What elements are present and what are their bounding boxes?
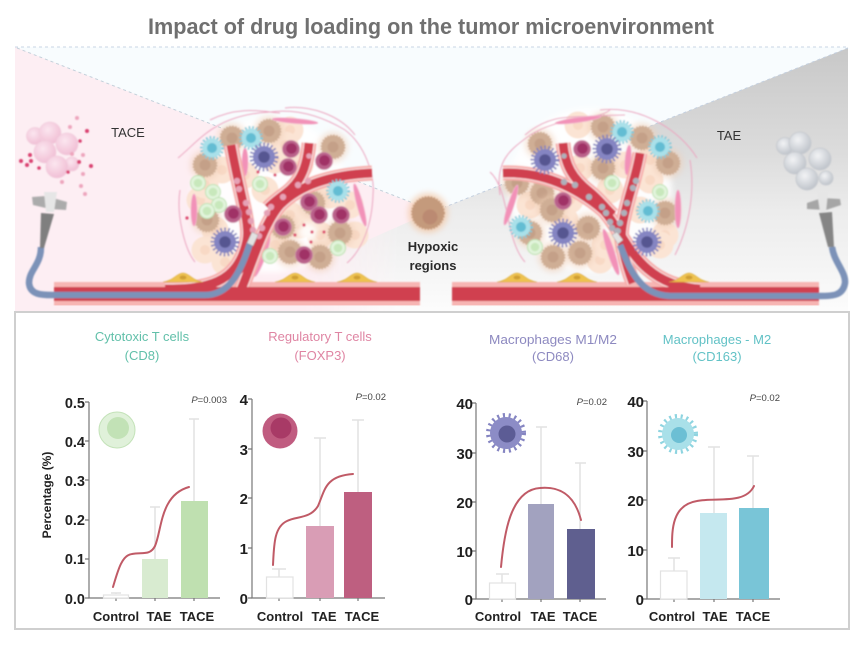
icon: macrophage: [489, 416, 523, 450]
icon: M2 macrophage: [661, 417, 695, 451]
heading: cytotoxic T cells: (CD8): [125, 348, 159, 363]
bar chart: regulatory T cells: 2: [240, 491, 248, 508]
bar chart: macrophages M1/M2: Control: [475, 609, 521, 624]
bar chart: macrophages M2: [627, 393, 780, 624]
bar chart: macrophages M1/M2: TAE: [530, 609, 556, 624]
right vessels: [452, 143, 819, 294]
icon: T cell: [99, 412, 135, 448]
panel: illustration of TACE and TAE: [15, 47, 848, 311]
bar chart: cytotoxic T cells: TAE: [146, 609, 172, 624]
bar chart: regulatory T cells: P=0.02: [356, 392, 386, 403]
bar chart: cytotoxic T cells: P=0.003: [191, 395, 227, 406]
left tumor: [186, 116, 368, 276]
bar chart: macrophages M2: P=0.02: [750, 393, 780, 404]
bar chart: macrophages M1/M2: 30: [456, 446, 473, 463]
right vessel blood cells: [561, 153, 639, 234]
bar chart: macrophages M2: 0: [636, 592, 644, 609]
heading: macrophages M1/M2: (CD68): [532, 349, 574, 364]
bar chart: macrophages M2: TACE: [736, 609, 771, 624]
bar chart: macrophages M2: TAE: [702, 609, 728, 624]
heading: regulatory T cells: Regulatory T cells: [268, 329, 372, 344]
pink drug-loaded microspheres: [19, 116, 93, 196]
bar chart: regulatory T cells: 3: [240, 442, 248, 459]
bar chart: regulatory T cells: TAE: [311, 609, 337, 624]
bar chart: cytotoxic T cells: 0.4: [65, 435, 85, 451]
bar chart: regulatory T cells: 4: [240, 392, 249, 409]
icon: regulatory T cell: [262, 414, 298, 448]
bar chart: macrophages M2: 40: [627, 394, 644, 411]
icon: hypoxic tumor cell: [408, 193, 448, 233]
left vessel blood cells: [234, 153, 312, 239]
left fibres: [178, 107, 373, 263]
label: TACE: TACE: [111, 125, 145, 140]
bar chart: regulatory T cells: 0: [240, 591, 248, 608]
bar chart: cytotoxic T cells: 0.0: [65, 592, 85, 608]
bar chart: cytotoxic T cells: 0.5: [65, 396, 85, 412]
left catheter: [29, 192, 258, 295]
bar chart: regulatory T cells: [240, 392, 386, 624]
bar chart: macrophages M1/M2: 0: [465, 592, 473, 609]
heading: cytotoxic T cells: Cytotoxic T cells: [95, 329, 190, 344]
heading: macrophages M2: (CD163): [692, 349, 742, 364]
bar chart: macrophages M1/M2: TACE: [563, 609, 598, 624]
bar chart: cytotoxic T cells: 0.1: [65, 552, 85, 568]
label: hypoxic regions: regions: [410, 258, 456, 273]
bar chart: macrophages M1/M2: [456, 396, 607, 624]
left stromal cells: [191, 117, 369, 278]
bar chart: macrophages M2: 10: [627, 543, 644, 560]
right stromal cells: [502, 114, 681, 276]
bar chart: cytotoxic T cells: 0.2: [65, 513, 85, 529]
label: TAE: TAE: [717, 128, 741, 143]
right catheter: [612, 192, 845, 296]
bar chart: regulatory T cells: TACE: [345, 609, 380, 624]
heading: regulatory T cells: (FOXP3): [294, 348, 346, 363]
left vessels: [54, 143, 420, 294]
bar chart: regulatory T cells: Control: [257, 609, 303, 624]
bar chart: macrophages M2: 20: [627, 493, 644, 510]
label: hypoxic regions: Hypoxic: [408, 239, 458, 254]
right tumor: [502, 108, 683, 274]
right fibres: [490, 109, 697, 262]
bar chart: macrophages M1/M2: 20: [456, 495, 473, 512]
bar chart: cytotoxic T cells: Control: [93, 609, 139, 624]
heading: macrophages M2: Macrophages - M2: [663, 332, 771, 347]
title: Impact of drug loading on the tumor microenvironment: [148, 14, 714, 39]
bar chart: macrophages M1/M2: P=0.02: [577, 397, 607, 408]
endothelial cells: [163, 273, 709, 282]
bar chart: macrophages M2: 30: [627, 444, 644, 461]
bar chart: cytotoxic T cells: 0.3: [65, 474, 85, 490]
bar chart: cytotoxic T cells: TACE: [180, 609, 215, 624]
heading: macrophages M1/M2: Macrophages M1/M2: [489, 332, 617, 347]
panel: chart frame: [15, 312, 849, 629]
gray empty microspheres: [776, 132, 833, 190]
bar chart: regulatory T cells: 1: [240, 541, 248, 558]
bar chart: cytotoxic T cells: [40, 395, 227, 624]
left immune cells: [185, 128, 350, 264]
bar chart: macrophages M2: Control: [649, 609, 695, 624]
y axis label: Percentage (%): [40, 452, 54, 538]
bar chart: macrophages M1/M2: 10: [456, 544, 473, 561]
right immune cells: [510, 122, 670, 254]
bar chart: macrophages M1/M2: 40: [456, 396, 473, 413]
